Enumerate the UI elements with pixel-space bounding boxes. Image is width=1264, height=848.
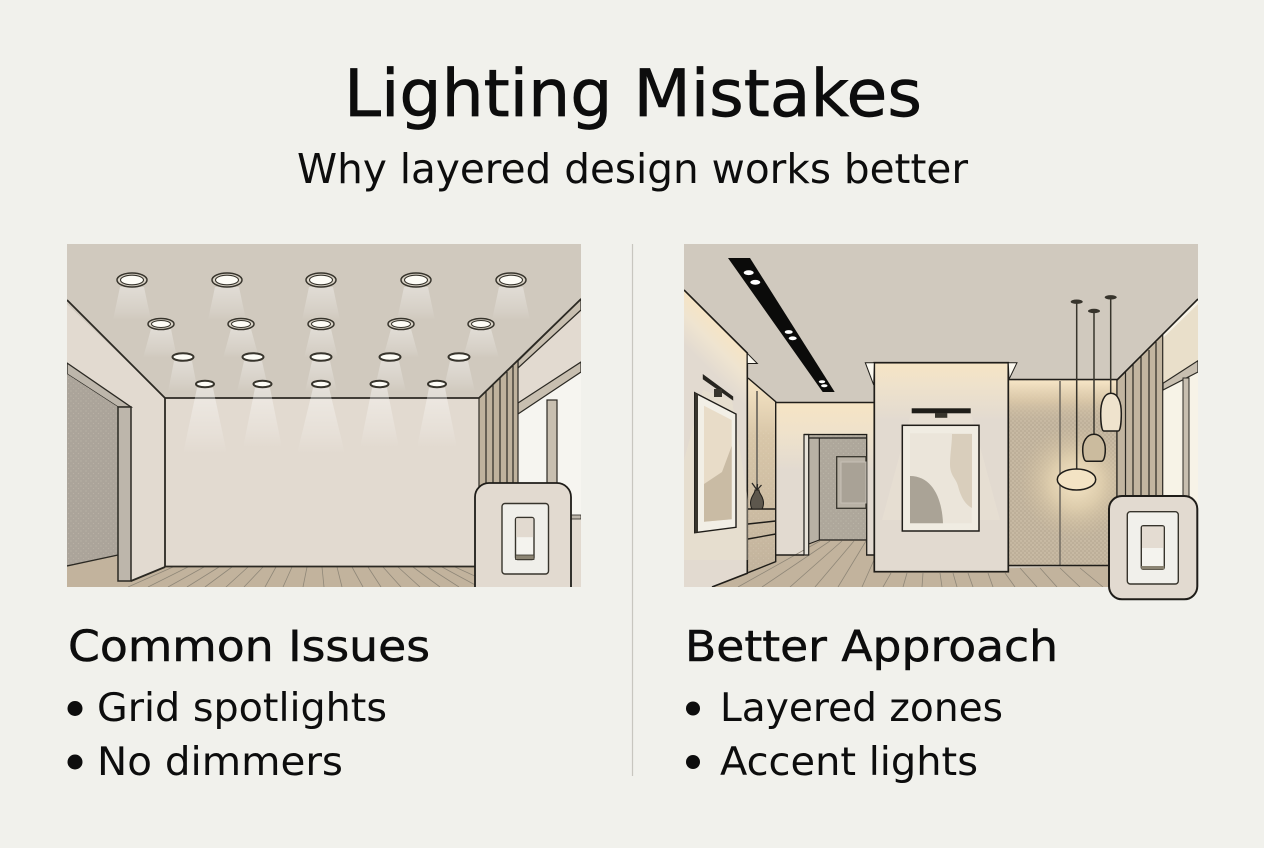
heading: better approach: Better Approach [685, 622, 1058, 672]
corridor back wall [776, 402, 875, 555]
heading: common issues: Common Issues [68, 622, 430, 672]
left wall with doorway [67, 300, 165, 581]
central framed art with picture light [902, 408, 979, 531]
right wall and window [479, 299, 581, 587]
ceiling [67, 244, 581, 398]
recessed spotlights grid [117, 273, 526, 387]
item: accent lights: Accent lights [720, 740, 978, 785]
back wall top edge [165, 299, 581, 398]
right back wall with glow [1008, 380, 1117, 566]
pendant: large [1057, 300, 1096, 490]
list: common issues [68, 686, 387, 785]
bullet [686, 755, 700, 769]
list: better approach [686, 686, 1003, 785]
item: grid spotlights: Grid spotlights [97, 686, 387, 731]
center divider [632, 244, 634, 776]
icon: dimmer wall switch [1109, 496, 1197, 599]
floor [67, 556, 474, 587]
pendant: tall [1101, 295, 1121, 431]
light beams [113, 287, 530, 392]
item: no dimmers: No dimmers [97, 740, 343, 785]
bullet [68, 754, 82, 770]
bullet [68, 701, 82, 716]
doorway to hallway [804, 434, 867, 555]
back wall [165, 398, 479, 567]
panel: grid-lit room illustration [67, 244, 581, 590]
central pillar [865, 363, 1017, 572]
panel: layered lighting room illustration [684, 244, 1198, 599]
floor [714, 540, 1108, 587]
ceiling [684, 244, 1198, 587]
wall wash beams [188, 388, 452, 430]
pendant: medium [1083, 309, 1105, 461]
bullet [686, 702, 700, 716]
left niche with shelf and vase [748, 378, 776, 573]
right slatted wall and window [1116, 298, 1198, 506]
infographic canvas [67, 66, 1198, 783]
subtitle: Why layered design works better [297, 145, 968, 193]
icon: on/off wall switch [475, 483, 571, 590]
item: layered zones: Layered zones [720, 686, 1003, 731]
pendant lights [1057, 295, 1121, 490]
title: Lighting Mistakes [344, 57, 922, 132]
track light [728, 258, 835, 392]
left framed art with picture light [694, 374, 748, 560]
left wall with wash light [684, 290, 757, 587]
